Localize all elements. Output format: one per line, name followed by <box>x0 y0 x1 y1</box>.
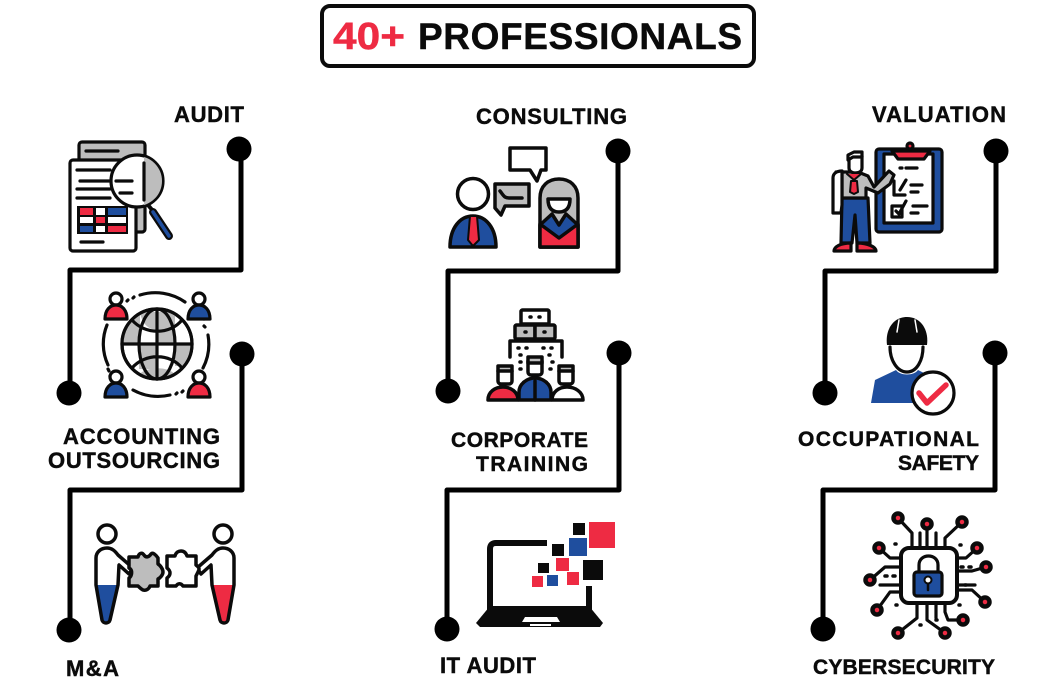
label: occupational safety: OCCUPATIONAL <box>798 428 979 451</box>
label: corporate training: CORPORATE <box>451 429 588 452</box>
label: accounting outsourcing: ACCOUNTING <box>63 424 220 449</box>
icon: valuation person with clipboard <box>833 143 942 251</box>
icon: globe with people <box>103 293 210 397</box>
icon: occupational safety worker <box>871 317 954 414</box>
icon: IT audit laptop with pixels <box>476 522 615 627</box>
label: cybersecurity: CYBERSECURITY <box>813 656 995 679</box>
icon: corporate training group <box>488 310 583 400</box>
icon: audit document and magnifier <box>70 142 169 251</box>
label: accounting outsourcing <box>48 424 220 473</box>
icon: merger people with puzzle gears <box>96 525 234 623</box>
title: 40+ <box>333 16 405 58</box>
connector: occupational safety to cybersecurity <box>810 340 1008 642</box>
label: corporate training: TRAINING <box>476 453 588 476</box>
icon: cybersecurity chip with padlock <box>866 514 990 638</box>
label: occupational safety <box>798 428 979 475</box>
label: occupational safety: SAFETY <box>898 452 979 475</box>
connector: consulting to corporate training <box>436 138 630 404</box>
label: valuation: VALUATION <box>872 102 1006 127</box>
label: audit: AUDIT <box>174 102 245 127</box>
title: PROFESSIONALS <box>418 16 742 57</box>
label: M&A: M&A <box>66 656 119 681</box>
connector: accounting outsourcing to M&A <box>56 342 254 642</box>
icon: consulting conversation <box>450 148 578 247</box>
title <box>322 6 754 66</box>
label: corporate training <box>451 429 588 476</box>
connector: corporate training to IT audit <box>434 340 632 642</box>
label: accounting outsourcing: OUTSOURCING <box>48 448 220 473</box>
label: consulting: CONSULTING <box>476 104 627 129</box>
connector: audit to accounting outsourcing <box>56 136 252 406</box>
connector: valuation to occupational safety <box>812 138 1008 406</box>
label: IT audit: IT AUDIT <box>440 653 537 678</box>
